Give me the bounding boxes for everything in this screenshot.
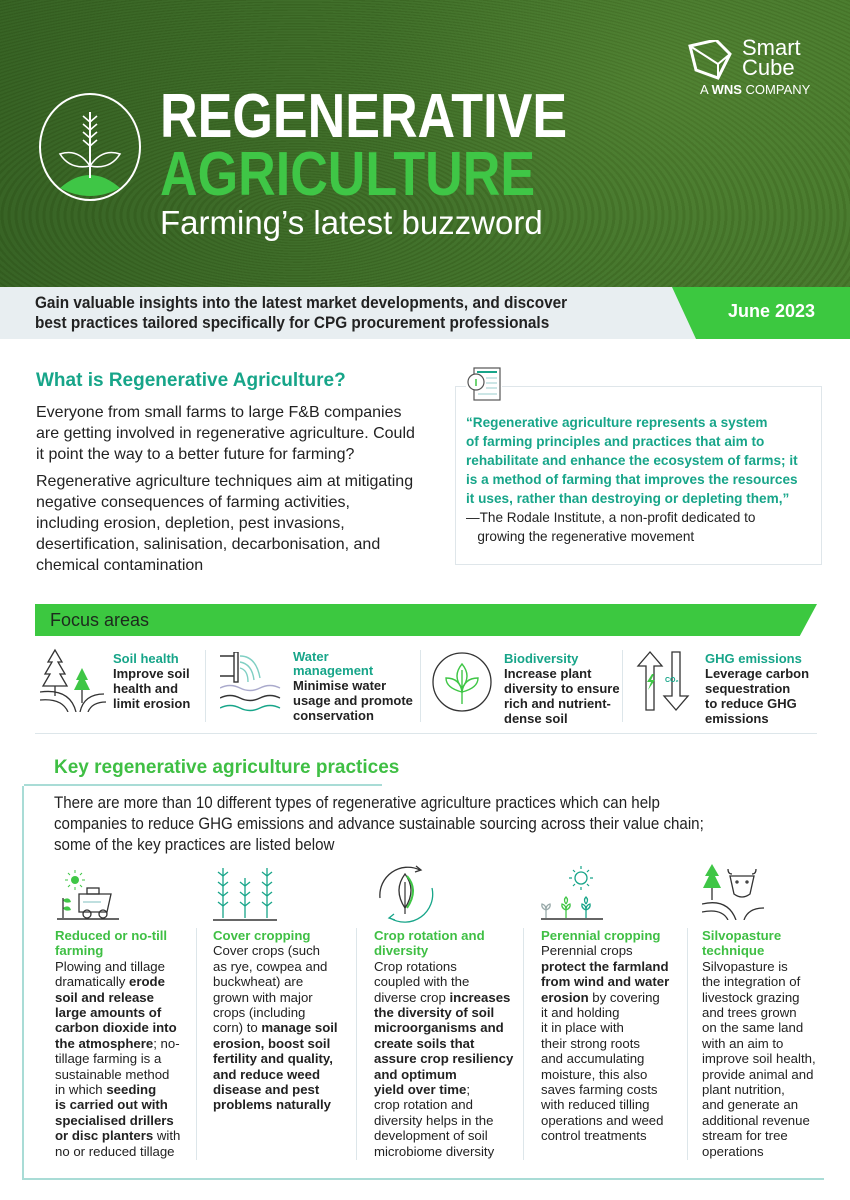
focus: soil health: Soil health — [113, 651, 179, 666]
practice: crop rotation: coupled with the — [374, 974, 469, 989]
quote text: it uses, rather than destroying or depleting them,” — [466, 491, 789, 506]
quote box — [455, 386, 822, 565]
practice: crop rotation: Crop rotations — [374, 959, 457, 974]
focus: biodiversity: diversity to ensure — [504, 681, 620, 696]
focus areas bar — [35, 604, 817, 636]
intro band: best practices tailored specifically for CPG procurement professionals — [35, 314, 549, 332]
key practices heading: Key regenerative agriculture practices — [54, 757, 399, 778]
practice: cover cropping: problems naturally — [213, 1097, 331, 1112]
practice: reduced or no-till — [55, 870, 180, 1159]
focus: GHG emissions — [636, 651, 809, 726]
practice: reduced or no-till: large amounts of — [55, 1005, 161, 1020]
hero header background — [0, 0, 850, 287]
practice: cover cropping: grown with major — [213, 990, 313, 1005]
intro band — [0, 287, 850, 339]
practice: crop rotation: create soils that — [374, 1036, 474, 1051]
subtitle: Farming’s latest buzzword — [160, 204, 543, 241]
date tag — [672, 287, 850, 339]
practice: silvopasture: and generate an — [702, 1097, 798, 1112]
key practices frame — [22, 786, 824, 1180]
key practices intro: companies to reduce GHG emissions and advance sustainable sourcing across their value chain; — [54, 814, 704, 833]
focus bottom divider — [35, 733, 817, 734]
practice: silvopasture: plant nutrition, — [702, 1082, 785, 1097]
practice: reduced or no-till: the atmosphere; no- — [55, 1036, 180, 1051]
icon: info document — [466, 367, 502, 403]
practice: perennial cropping: it and holding — [541, 1005, 619, 1020]
focus: water management: usage and promote — [293, 693, 413, 708]
practice: reduced or no-till: farming — [55, 943, 103, 958]
quote text: is a method of farming that improves the resources — [466, 472, 798, 487]
logo: The Smart Cube: A WNS COMPANY — [700, 82, 810, 97]
quote text — [466, 415, 798, 506]
practice: silvopasture: stream for tree — [702, 1128, 788, 1143]
practice: silvopasture: improve soil health, — [702, 1051, 816, 1066]
practice: perennial cropping: operations and weed — [541, 1113, 663, 1128]
logo: The Smart Cube: Cube — [742, 55, 795, 80]
title: AGRICULTURE — [160, 140, 535, 209]
practice: crop rotation: diversity helps in the — [374, 1113, 493, 1128]
practice: crop rotation: assure crop resiliency — [374, 1051, 513, 1066]
practice: perennial cropping: from wind and water — [541, 974, 669, 989]
text: what is paragraphs: it point the way to a better future for farming? — [36, 446, 354, 463]
practice: cover cropping: buckwheat) are — [213, 974, 303, 989]
practice: reduced or no-till: tillage farming is a — [55, 1051, 161, 1066]
quote text: of farming principles and practices that aim to — [466, 434, 764, 449]
text: what is paragraphs: negative consequences of farming activities, — [36, 494, 350, 511]
focus: GHG emissions: to reduce GHG — [705, 696, 797, 711]
intro band: Gain valuable insights into the latest market developments, and discover — [35, 294, 567, 312]
practice: crop rotation: Crop rotation and — [374, 928, 485, 943]
practice: reduced or no-till: Reduced or no-till — [55, 928, 167, 943]
text: what is paragraphs: desertification, salinisation, decarbonisation, and — [36, 536, 380, 553]
practice: reduced or no-till: no or reduced tillage — [55, 1144, 174, 1159]
practice: perennial cropping: it in place with — [541, 1020, 624, 1035]
focus: GHG emissions: GHG emissions — [705, 651, 802, 666]
practice: silvopasture: the integration of — [702, 974, 800, 989]
title: REGENERATIVE — [160, 82, 567, 151]
practice: cover cropping: disease and pest — [213, 1082, 319, 1097]
text: what is paragraphs — [36, 404, 415, 574]
practice: cover cropping: corn) to manage soil — [213, 1020, 338, 1035]
text: what is paragraphs: including erosion, depletion, pest invasions, — [36, 515, 345, 532]
focus: biodiversity: dense soil — [504, 711, 568, 726]
column dividers — [196, 928, 197, 1160]
focus: water management: management — [293, 663, 373, 678]
practice: crop rotation: microorganisms and — [374, 1020, 504, 1035]
focus: water management: conservation — [293, 708, 374, 723]
focus areas bar: Focus areas — [50, 610, 149, 630]
quote text: “Regenerative agriculture represents a system — [466, 415, 767, 430]
focus: water management: Minimise water — [293, 678, 386, 693]
practice: reduced or no-till: carbon dioxide into — [55, 1020, 177, 1035]
practice: silvopasture: provide animal and — [702, 1067, 813, 1082]
focus: biodiversity: Biodiversity — [504, 651, 578, 666]
practice: perennial cropping: saves farming costs — [541, 1082, 658, 1097]
text: what is paragraphs: are getting involved in regenerative agriculture. Could — [36, 425, 415, 442]
practice: perennial cropping: and accumulating — [541, 1051, 644, 1066]
practice: cover cropping: fertility and quality, — [213, 1051, 333, 1066]
practice: perennial cropping: their strong roots — [541, 1036, 640, 1051]
practice: crop rotation — [374, 866, 514, 1159]
practice: silvopasture — [702, 864, 816, 1159]
practice: crop rotation: diversity — [374, 943, 428, 958]
focus: biodiversity — [432, 651, 620, 726]
practice: crop rotation: microbiome diversity — [374, 1144, 494, 1159]
date tag: June 2023 — [728, 301, 815, 321]
practice: reduced or no-till: is carried out with — [55, 1097, 168, 1112]
logo: The Smart Cube — [688, 35, 810, 97]
practice: reduced or no-till: Plowing and tillage — [55, 959, 165, 974]
attribution: —The Rodale Institute, a non-profit dedicated to — [466, 510, 755, 525]
text: what is paragraphs: chemical contamination — [36, 557, 203, 574]
practice: cover cropping — [213, 868, 338, 1112]
practice: reduced or no-till: sustainable method — [55, 1067, 169, 1082]
focus: soil health: Improve soil — [113, 666, 190, 681]
practice: silvopasture: and trees grown — [702, 1005, 797, 1020]
practice: silvopasture: livestock grazing — [702, 990, 799, 1005]
heading: what is: What is Regenerative Agriculture? — [36, 370, 346, 391]
focus: GHG emissions: emissions — [705, 711, 769, 726]
focus: soil health: limit erosion — [113, 696, 190, 711]
text: what is paragraphs: Everyone from small farms to large F&B companies — [36, 404, 401, 421]
practice: cover cropping: Cover crops (such — [213, 943, 320, 958]
practice: perennial cropping — [541, 866, 670, 1143]
focus: water management: Water — [293, 649, 329, 664]
practice: reduced or no-till: soil and release — [55, 990, 154, 1005]
title — [160, 82, 567, 209]
practice: reduced or no-till: specialised drillers — [55, 1113, 174, 1128]
key practices intro: There are more than 10 different types of regenerative agriculture practices which can help — [54, 793, 660, 812]
practice: silvopasture: operations — [702, 1144, 764, 1159]
key practices intro — [54, 793, 704, 854]
focus: GHG emissions: sequestration — [705, 681, 790, 696]
focus: biodiversity: rich and nutrient- — [504, 696, 611, 711]
practice: silvopasture: Silvopasture — [702, 928, 781, 943]
text: what is paragraphs: Regenerative agriculture techniques aim at mitigating — [36, 473, 413, 490]
attribution: growing the regenerative movement — [477, 529, 694, 544]
focus: soil health: health and — [113, 681, 178, 696]
practice: silvopasture: technique — [702, 943, 764, 958]
attribution — [466, 510, 755, 544]
practice: crop rotation: yield over time; — [374, 1082, 470, 1097]
practice: cover cropping: as rye, cowpea and — [213, 959, 327, 974]
practice: silvopasture: with an aim to — [702, 1036, 783, 1051]
practice: cover cropping: erosion, boost soil — [213, 1036, 330, 1051]
practice: crop rotation: crop rotation and — [374, 1097, 473, 1112]
practice: crop rotation: and optimum — [374, 1067, 457, 1082]
practice: perennial cropping: erosion by covering — [541, 990, 660, 1005]
practice: reduced or no-till: or disc planters with — [55, 1128, 180, 1143]
practice: perennial cropping: moisture, this also — [541, 1067, 647, 1082]
practice: silvopasture: on the same land — [702, 1020, 803, 1035]
practice: reduced or no-till: in which seeding — [55, 1082, 156, 1097]
practice: reduced or no-till: dramatically erode — [55, 974, 165, 989]
quote text: rehabilitate and enhance the ecosystem of farms; it — [466, 453, 798, 468]
focus: GHG emissions: Leverage carbon — [705, 666, 809, 681]
practice: crop rotation: development of soil — [374, 1128, 488, 1143]
key practices intro: some of the key practices are listed below — [54, 835, 334, 854]
focus: biodiversity: Increase plant — [504, 666, 591, 681]
logo: The Smart Cube: Smart — [742, 35, 801, 60]
focus: GHG emissions: CO₂ — [665, 677, 679, 684]
practice: cover cropping: Cover cropping — [213, 928, 310, 943]
practice: perennial cropping: Perennial cropping — [541, 928, 660, 943]
practice: cover cropping: crops (including — [213, 1005, 305, 1020]
practice: silvopasture: Silvopasture is — [702, 959, 788, 974]
practice: perennial cropping: control treatments — [541, 1128, 647, 1143]
practice: crop rotation: diverse crop increases — [374, 990, 510, 1005]
practice: crop rotation: the diversity of soil — [374, 1005, 494, 1020]
logo emblem: wheat in circle — [39, 93, 141, 201]
focus: soil health — [40, 648, 190, 712]
practice: perennial cropping: with reduced tilling — [541, 1097, 650, 1112]
practice: perennial cropping: protect the farmland — [541, 959, 668, 974]
practice: cover cropping: and reduce weed — [213, 1067, 320, 1082]
practice: silvopasture: additional revenue — [702, 1113, 810, 1128]
practice: perennial cropping: Perennial crops — [541, 943, 633, 958]
focus: water management — [220, 649, 413, 723]
